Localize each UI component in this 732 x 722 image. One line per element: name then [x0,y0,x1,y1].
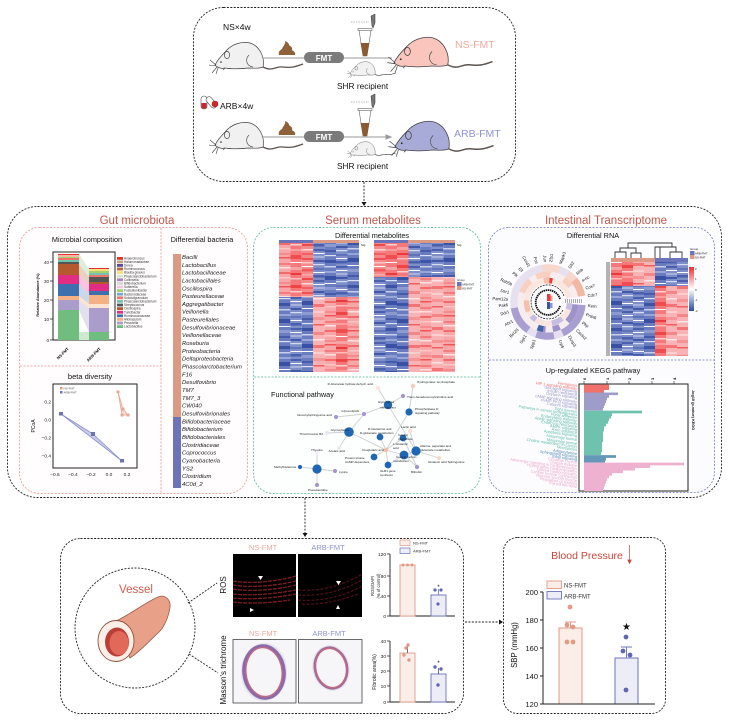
chart: stacked composition bars: Relative Abundance (%) [36,273,40,317]
chart: fibrotic area bars: * [437,660,440,667]
chart: functional pathway network: Glycosylation [331,428,349,432]
labels: KEGG pathway names: HIF-1 signaling pathway [536,380,578,391]
labels: KEGG pathway names: Sphingolipid signaling [540,449,578,459]
chart: beta diversity PCoA: −0.2 [86,472,96,478]
heading: Differential metabolites: Differential metabolites [335,231,409,240]
chart: functional pathway network: Pseudouridine [308,488,328,492]
heading: Differential RNA: Differential RNA [567,231,619,240]
chart: beta diversity PCoA: 0.0 [44,418,51,424]
labels: circular heatmap genes: Kern [588,303,598,309]
chart: ROS/DAPI bars: ROS/DAPI [370,576,375,596]
legend: composition taxa: Phascolarctobacterium [124,274,157,278]
labels: KEGG pathway names: Oxytocin signaling [546,391,578,400]
chart: KEGG bar chart [579,377,695,491]
chart: beta diversity PCoA: −0.4 [68,472,78,478]
labels: circular heatmap genes: Ell [517,266,524,273]
chart: KEGG bar chart: 4 [672,377,677,380]
chart: functional pathway network [274,380,465,492]
text: NS-FMT Masson: NS-FMT [249,629,278,638]
labels: circular heatmap genes: Fos [533,256,539,264]
labels: KEGG pathway names: Endocytosis pathway [541,413,578,423]
label: FMT pill top: FMT [316,54,332,63]
labels: KEGG pathway names: Apelin signaling pathway [534,415,578,426]
legend: composition taxa: Streptococcus [124,303,145,307]
chart: KEGG bar chart: -log10 (p-value) KEGG [691,390,695,430]
chart: circular gene heatmap [492,251,598,350]
text: NS-FMT top: NS-FMT [249,543,278,552]
chart: beta diversity PCoA: −0.4 [42,454,51,460]
chart: metabolite heatmap right [374,240,462,372]
legend: composition taxa: Phascolarctobacterium [124,300,157,304]
chart: ROS/DAPI bars: (% of control) [376,573,381,598]
chart: functional pathway network: Glutamic acid Sphingosine [428,460,465,464]
labels: KEGG pathway names: Circadian rhythm [548,456,578,465]
list: differential bacteria taxa: Lactobacillaceae [182,270,227,276]
legend: NS-FMT / ARB-FMT: ARB-FMT [413,548,431,554]
image: ROS NS-FMT [233,554,296,617]
labels: KEGG pathway names: Axon guidance [551,426,578,435]
chart: functional pathway network: Azelaic acid [328,449,345,453]
labels: circular heatmap genes: Cdc7 [587,292,598,298]
label: FMT pill bottom: FMT [316,133,332,142]
chart: functional pathway network: Thromboxane B2 [299,432,323,436]
panel: multi-omics outer frame [8,206,722,498]
text: ARB-FMT: ARB-FMT [454,128,501,140]
legend: composition taxa: Sutterella [124,285,138,289]
labels: KEGG pathway names: Ferroptosis [558,380,578,388]
chart: functional pathway network: D-Glutamine and [368,427,392,431]
icon: feces NS [279,41,295,55]
labels: circular heatmap genes: Gli2 [567,260,576,269]
legend: gene heatmap colour bar: Group [690,247,699,251]
chart: functional pathway network: GLB1 gene [380,469,396,473]
label: FMT pill bottom [304,131,344,142]
list: differential bacteria taxa: 4C0d_2 [182,482,203,488]
list: differential bacteria taxa: Desulfovibrionales [182,412,230,418]
chart: functional pathway network: glutamate metabolism [420,448,451,452]
labels: circular heatmap genes: Sgk1 [518,333,528,345]
labels: KEGG pathway names: Thyroid hormone [548,480,578,489]
labels: KEGG pathway names [510,380,578,489]
labels: KEGG pathway names: Calcium signaling [547,401,578,410]
chart: functional pathway network: signaling pathway [415,411,440,415]
legend: NS-FMT / ARB-FMT: NS-FMT [413,540,429,546]
chart: KEGG bar chart: 2 [627,377,632,380]
chart: functional pathway network: Methylhistamine [274,465,297,469]
labels: circular heatmap genes: Pkp [581,320,590,329]
text: SHR recipient top: SHR recipient [337,81,389,91]
chart: functional pathway network: Lysine [339,470,348,474]
chart: beta diversity PCoA [31,384,137,478]
legend: metabolite groups: ARB-FMT [462,282,475,286]
heading: Up-regulated KEGG pathway: Up-regulated KEGG pathway [546,366,641,375]
text: ARB-FMT Masson: ARB-FMT [312,629,346,638]
list: differential bacteria taxa: Bacilli [182,255,198,261]
chart: functional pathway network: Phospholipase D [415,407,439,411]
icon: recipient mouse bottom [347,142,396,158]
chart: KEGG bar chart: 0 [582,377,587,380]
list: differential bacteria taxa: Veillonella [182,310,209,316]
labels: KEGG pathway names: Pathways in cancer proteoglycans [518,404,578,417]
legend: composition taxa: Collinsella [124,278,139,282]
chart: KEGG bar chart: 3 [650,377,655,380]
list: differential bacteria taxa: TM7_3 [182,396,201,402]
list: differential bacteria taxa: Clostridium [182,474,212,480]
labels: circular heatmap genes: Plk [511,271,520,279]
labels: KEGG pathway names: Endocrine resistance [541,419,578,429]
chart: fibrotic area bars: 0 [383,700,386,706]
heading: Blood Pressure: Blood Pressure [551,550,623,562]
chart: SBP bars [510,588,655,709]
panel: gut microbiota [20,215,248,494]
chart: functional pathway network: Thymine [311,448,323,452]
list: differential bacteria taxa: Clostridiaceae [182,443,220,449]
chart: functional pathway network: D-Glucarate hydrate dehydr. acid [328,382,373,386]
chart: metabolite heatmap left [279,240,366,372]
legend: gene heatmap colour bar: 2 [695,267,697,271]
labels: KEGG pathway names: Necroptosis [557,444,578,452]
heading: Gut microbiota: Gut microbiota [100,215,175,227]
chart: gene heatmap [606,243,688,356]
chart: beta diversity PCoA: 0.2 [124,472,131,478]
legend: composition taxa: Ruminococcaceae [124,314,150,318]
labels: KEGG pathway names: Vascular smooth muscle [535,472,578,483]
list: differential bacteria taxa: Roseburia [182,341,210,347]
illustration: vessel circle: Vessel [119,584,153,596]
chart: functional pathway network: Alanine, aspartate and [420,444,451,448]
chart: stacked composition bars: 10 [44,317,49,322]
icon: donor mouse NS [209,42,303,74]
image: ROS ARB-FMT [298,554,362,617]
chart: KEGG bar chart: 1 [605,377,610,380]
labels: circular heatmap genes: Ccnd1 [521,255,532,268]
chart: fibrotic area bars: 30 [381,654,386,660]
list: differential bacteria taxa: TM7 [182,388,195,394]
text: SHR recipient bottom: SHR recipient [337,161,389,171]
chart: SBP bars: 160 [525,644,538,653]
legend: gene heatmap colour bar: -2 [695,309,698,313]
list: differential bacteria taxa: Pasteurellales [182,318,219,324]
arrow: analyses to vessel [302,498,308,537]
labels: KEGG pathway names: cGMP-PKG signaling [540,397,578,407]
connector: vessel to ROS [188,583,217,603]
legend: composition taxa: Prevotella [124,321,138,325]
labels: circular heatmap genes: Spp1 [529,338,537,350]
chart: fibrotic area bars: 40 [381,639,386,645]
icon: capsule pills [201,95,218,109]
labels: circular heatmap genes: Cox7 [585,283,596,291]
chart: ROS/DAPI bars: 120 [378,552,386,558]
list: differential bacteria taxa: Desulfovibrio [182,380,217,386]
chart: functional pathway network: metabolism [380,406,396,410]
legend: blood pressure groups: ARB-FMT [564,594,591,600]
labels: circular heatmap genes: Prdx6 [585,312,598,321]
legend: metabolite groups: NS-FMT [462,286,473,290]
legend: metabolite groups [457,278,475,290]
chart: differential bacteria side bar [173,254,181,488]
chart: stacked composition bars: 20 [44,298,49,303]
legend: composition taxa: Bacteroidaceae [124,292,146,296]
heading: Serum metabolites: Serum metabolites [325,215,421,227]
labels: KEGG pathway names: Apoptosis signaling [544,428,578,438]
legend: composition taxa: Anaerotruncus [124,256,145,260]
labels: circular heatmap genes [492,251,598,350]
text: ARB-FMT top: ARB-FMT [311,543,345,552]
labels: circular heatmap genes: a-nc [581,274,590,283]
legend: composition taxa: Oscillospira [124,307,141,311]
heading: Microbial composition: Microbial composition [52,235,122,244]
labels: circular heatmap genes: Lrp5 [558,339,565,349]
icon: feces ARB [279,121,295,135]
chart: metabolite heatmap right: Sig- [457,243,462,247]
icon: recipient mouse top [347,62,396,78]
chart: ROS/DAPI bars: 80 [381,574,386,580]
legend: composition taxa: Allobaculum [124,318,142,322]
legend: blood pressure groups [547,581,591,600]
text: NS-FMT: NS-FMT [455,39,495,51]
legend: composition taxa: Ruminococcus [124,267,145,271]
labels: circular heatmap genes: Cavin2 [575,328,588,341]
chart: ROS/DAPI bars: 0 [383,614,386,620]
legend: metabolite groups: Group [457,278,465,282]
legend: composition taxa: Subdoligranulum [124,296,148,300]
arrow: ARB donor to recipient [263,135,391,139]
labels: circular heatmap genes: Rhb [575,267,585,276]
labels: KEGG pathway names: Adipocytokine [553,448,578,456]
chart: functional pathway network: acid [393,446,399,450]
panel: intestinal transcriptome [488,215,714,492]
labels: KEGG pathway names: Dilated cardiomyopathy [537,466,578,477]
chart: functional pathway network: phosphate [398,437,413,441]
chart: fibrotic area bars: Fibrotic area(%) [372,654,378,690]
chart: functional pathway network: Lactic acid [401,425,416,429]
chart: SBP bars: SBP (mmHg) [510,622,519,668]
chart: beta diversity PCoA: 0.0 [106,472,113,478]
labels: KEGG pathway names: Choline metabolism in cancer [526,437,578,449]
chart: ROS/DAPI bars [370,552,455,620]
labels: circular heatmap genes: Pak6 [498,302,509,308]
heading: Intestinal Transcriptome: Intestinal Transcriptome [545,215,667,227]
legend: gene heatmap colour bar: NS-FMT [695,256,706,260]
list: differential bacteria taxa: Phascolarctobacterium [182,364,242,370]
legend: composition taxa: Blautia gnavus [124,271,145,275]
labels: KEGG pathway names: Focal adhesion [551,411,578,420]
chart: fibrotic area bars: 20 [381,669,386,675]
image: Masson ARB-FMT [298,640,362,703]
text: ARB×4w: ARB×4w [220,101,254,111]
icon: down arrow [628,545,631,564]
chart: functional pathway network: Glycerolipids [341,409,359,413]
labels: circular heatmap genes: Zfp1 [548,253,554,262]
chart: beta diversity PCoA: −0.6 [50,472,60,478]
list: differential bacteria taxa: Veillonellaceae [182,333,222,339]
icon: tube top [351,14,375,56]
icon: ARB-FMT mouse [388,121,494,157]
labels: KEGG pathway names: Tight junction [554,406,578,414]
chart: stacked composition bars: NS-FMT [56,346,70,361]
list: differential bacteria taxa: F16 [182,372,193,378]
labels: KEGG pathway names: ErbB signaling [552,454,578,462]
chart: stacked composition bars: 0 [46,338,49,343]
heading: Functional pathway: Functional pathway [271,390,334,399]
connector: vessel to Masson [189,654,218,673]
list: differential bacteria taxa: Bifidobacteriaceae [182,420,231,426]
chart: functional pathway network: Inositol [398,433,408,437]
list: differential bacteria taxa: Oscillospira [182,286,213,292]
icon: tube bottom [351,94,375,136]
chart: beta diversity PCoA: NS-FMT [64,387,75,391]
label: ROS: ROS [219,576,228,594]
chart: stacked composition bars: ARB-FMT [85,346,102,363]
chart: functional pathway network: L-Glutamic [393,442,408,446]
chart: functional pathway network: Oxoglutaric acid [362,448,384,452]
list: differential bacteria taxa: Bifidobacterium [182,427,223,433]
legend: composition taxa: Fusicatenibacter [124,289,148,293]
labels: KEGG pathway names: Glucagon signaling [544,384,578,394]
chart: beta diversity PCoA: 0.2 [44,400,51,406]
chart: functional pathway network: D-glutamate metabolism [360,431,394,435]
legend: composition taxa: Lactobacillus [124,325,143,329]
labels: circular heatmap genes: Dusp3 [567,335,578,348]
chart: functional pathway network: Glucosylsphingosine acid [297,413,332,417]
icon: donor mouse ARB [209,122,303,154]
labels: KEGG pathway names: Regulation of lipolysis [540,476,578,486]
list: differential bacteria taxa: Aggregatibacter [181,302,225,308]
chart: functional pathway network: Protein kinase [345,456,365,460]
legend: composition taxa [117,256,157,329]
chart: functional pathway network: synthesis [380,473,393,477]
list: differential bacteria taxa: YS2 [182,466,194,472]
chart: stacked composition bars [36,252,115,363]
panel: vessel assays [60,538,464,714]
legend: gene heatmap colour bar: ARB-FMT [695,252,708,256]
label: Masson's trichrome: Masson's trichrome [219,635,228,705]
list: differential bacteria taxa: Deltaproteobacteria [182,356,234,362]
chart: functional pathway network: Glycerolipid [378,400,394,404]
list: differential bacteria taxa: Bifidobacteriales [182,435,225,441]
chart: fibrotic area bars [372,639,455,706]
heading: Differential bacteria: Differential bacteria [171,235,234,244]
chart: functional pathway network: Trans-hexadecenoylcarnitine acid [407,395,453,399]
labels: circular heatmap genes: Rab5b [500,277,514,287]
list: differential bacteria taxa: CW040 [182,404,202,410]
list: differential bacteria taxa: Cyanobacteria [182,458,221,464]
legend: gene heatmap colour bar: 1 [695,277,697,281]
list: differential bacteria taxa: Pasteurellaceae [182,294,225,300]
labels: circular heatmap genes: Mapk3 [558,251,567,265]
labels: KEGG pathway names: Mitophagy animal [547,437,578,446]
labels: circular heatmap genes: Dsr1 [500,288,510,295]
icon: NS-FMT mouse [387,37,493,73]
chart: SBP bars: 140 [525,672,538,681]
chart: stacked composition bars: 30 [44,279,49,284]
labels: KEGG pathway names: Cardiac muscle contraction [530,469,578,480]
arrow: vessel to blood pressure [465,620,503,624]
chart: metabolite heatmap left: Sig- [361,243,366,247]
panel: blood pressure [504,538,666,714]
panel: FMT experimental design [194,8,516,182]
chart: functional pathway network: metabolism [393,459,409,463]
labels: circular heatmap genes: Ahr1 [504,318,514,327]
labels: KEGG pathway names: Adrenergic signaling in cardiomyocytes [510,457,578,471]
labels: circular heatmap genes: Jun [542,255,548,263]
labels: circular heatmap genes: Ddr1 [500,309,510,316]
list: differential bacteria taxa: Desulfovibrionaceae [182,326,236,332]
list: differential bacteria taxa: Lactobacillus [182,263,216,269]
legend: composition taxa: Bifidobacterium [124,282,146,286]
list: differential bacteria taxa: Proteobacteria [182,349,221,355]
legend: composition taxa: Halomonadaceae [124,260,149,264]
chart: ROS/DAPI bars: * [437,584,440,591]
chart: SBP bars: 200 [525,588,538,597]
label: FMT pill top [304,52,344,63]
legend: gene heatmap colour bar: 0 [695,288,697,292]
chart: SBP bars: ★ [622,622,631,633]
labels: circular heatmap genes: Pam12a [492,296,509,302]
arrow: design to analyses [362,182,366,206]
chart: functional pathway network: cGMP-dependent [345,460,369,464]
legend: NS-FMT / ARB-FMT [400,540,431,554]
text: NS×4w: NS×4w [223,22,251,32]
chart: fibrotic area bars: 10 [381,684,386,690]
legend: gene heatmap colour bar [689,247,708,313]
labels: KEGG pathway names: Autophagy animal [546,433,578,442]
chart: functional pathway network: Hydrogenase 1a phosphate [417,380,455,384]
chart: beta diversity PCoA: PCoA [31,419,37,433]
image: Masson NS-FMT [233,640,296,703]
chart: ROS/DAPI bars: 40 [381,594,386,600]
list: differential bacteria taxa [181,255,242,488]
labels: circular heatmap genes: Bcl2l1 [508,326,520,338]
labels: KEGG pathway names: Insulin resistance [547,388,578,397]
chart: beta diversity PCoA: −0.2 [42,436,51,442]
panel: serum metabolites [254,215,480,494]
chart: functional pathway network: Central carbon [396,455,417,459]
list: differential bacteria taxa: Coprococcus [182,450,216,456]
arrow: NS donor to recipient [263,57,392,59]
labels: KEGG pathway names: Chagas disease [549,459,578,468]
labels: KEGG pathway names: AMPK signaling [550,423,578,432]
chart: SBP bars: 180 [525,616,538,625]
illustration: vessel circle [75,568,195,688]
chart: functional pathway network: Bilirubin [411,470,422,474]
heading: beta diversity: beta diversity [68,372,112,381]
legend: blood pressure groups: NS-FMT [564,584,587,590]
legend: gene heatmap colour bar: -1 [695,298,698,302]
labels: KEGG pathway names: Hypertrophic cardiomyopathy [527,462,578,474]
chart: SBP bars: 120 [525,700,538,709]
legend: composition taxa: Turicibacter [124,310,141,314]
labels: KEGG pathway names: cAMP signaling pathway [535,393,578,404]
legend: composition taxa: Dorea [124,264,133,268]
chart: stacked composition bars: 40 [44,260,49,265]
list: differential bacteria taxa: Lactobacillales [182,278,221,284]
chart: beta diversity PCoA: ARB-FMT [64,391,77,395]
